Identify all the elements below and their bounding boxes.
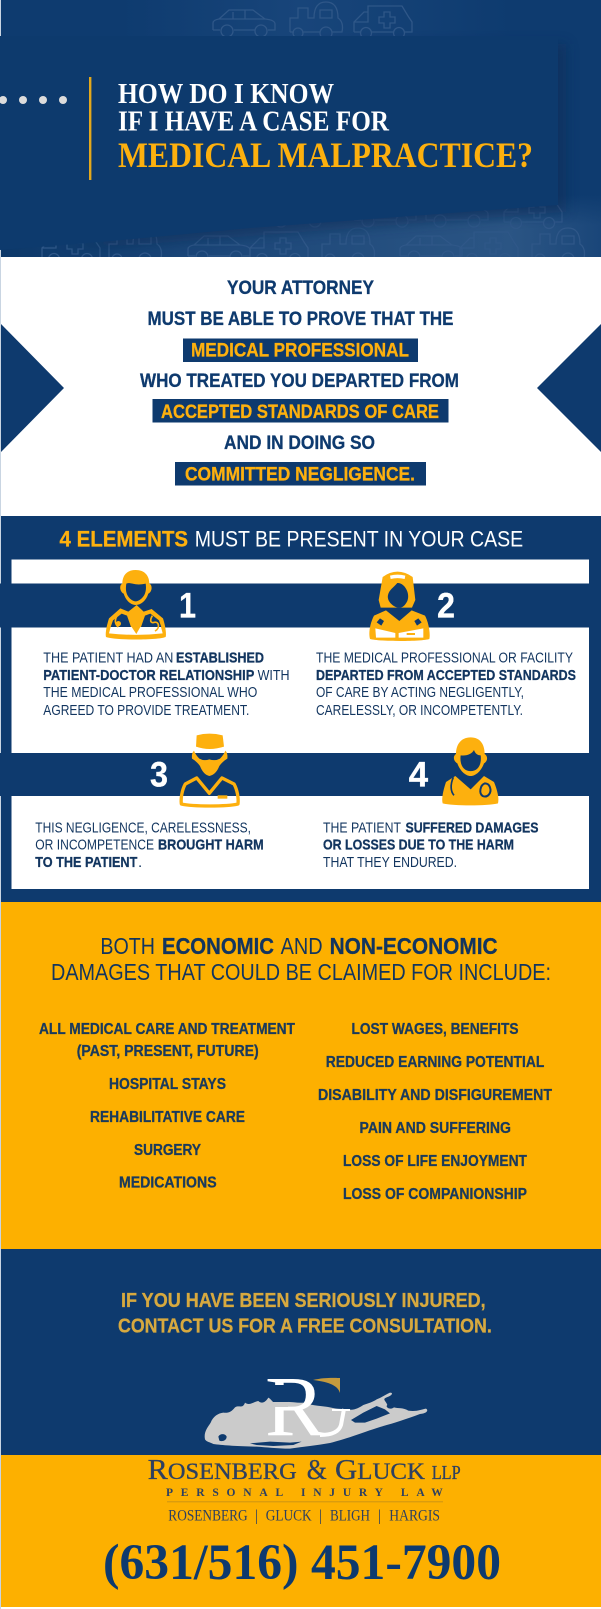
- call to action text: CONTACT US FOR A FREE CONSULTATION.: [118, 1315, 492, 1338]
- title panel: [0, 36, 558, 250]
- element 1 text: [43, 650, 290, 719]
- white cards and bands: [0, 560, 601, 889]
- intro text: [140, 277, 459, 454]
- monogram curve of G: [320, 1409, 344, 1435]
- monogram gold arc: [313, 1378, 340, 1393]
- number 4: 4: [409, 756, 429, 795]
- economic damages list: REHABILITATIVE CARE: [90, 1109, 245, 1126]
- partner names: BLIGH: [330, 1508, 370, 1525]
- firm tagline: PERSONAL INJURY LAW: [166, 1487, 443, 1499]
- partner names: GLUCK: [266, 1508, 312, 1525]
- heading: [60, 526, 523, 552]
- element 1 text: WITH: [258, 667, 290, 684]
- element 1 text: PATIENT-DOCTOR RELATIONSHIP: [43, 667, 254, 684]
- element 4 text: THAT THEY ENDURED.: [323, 854, 457, 871]
- firm name: GLUCK: [335, 1455, 425, 1486]
- firm name: ROSENBERG: [148, 1455, 297, 1486]
- element 2 text: [316, 650, 576, 719]
- element 3 text: BROUGHT HARM: [158, 836, 264, 853]
- partner names: |: [319, 1508, 322, 1525]
- intro panel: [1, 257, 601, 516]
- element 2 text: CARELESSLY, OR INCOMPETENTLY.: [316, 702, 523, 719]
- firm name: &: [307, 1455, 327, 1486]
- element 1 text: ESTABLISHED: [176, 650, 264, 667]
- title: IF I HAVE A CASE FOR: [118, 106, 390, 138]
- highlight: committed negligence: COMMITTED NEGLIGENCE.: [185, 464, 415, 486]
- partner names: |: [255, 1508, 258, 1525]
- economic damages list: MEDICATIONS: [119, 1175, 217, 1192]
- non-economic damages list: PAIN AND SUFFERING: [360, 1120, 511, 1137]
- partner names: ROSENBERG: [168, 1508, 248, 1525]
- economic damages list: ALL MEDICAL CARE AND TREATMENT: [39, 1021, 295, 1038]
- economic damages list: SURGERY: [134, 1142, 201, 1159]
- header panel: [0, 0, 601, 265]
- panel shadow: [60, 44, 566, 247]
- icon: nurse: [369, 572, 430, 641]
- element 3 text: TO THE PATIENT: [35, 854, 138, 871]
- element 3 text: [35, 819, 264, 871]
- panel: firm footer: [1, 1455, 601, 1609]
- number 3: 3: [150, 756, 168, 795]
- highlight: accepted standards of care: ACCEPTED STANDARDS OF CARE: [161, 401, 439, 423]
- intro text: AND IN DOING SO: [224, 432, 375, 454]
- title: HOW DO I KNOW: [118, 78, 334, 110]
- economic damages list: (PAST, PRESENT, FUTURE): [77, 1043, 259, 1060]
- element 2 text: OF CARE BY ACTING NEGLIGENTLY,: [316, 684, 524, 701]
- damages heading: [51, 933, 551, 985]
- damages heading: AND: [281, 933, 323, 959]
- firm name: [148, 1455, 461, 1486]
- partner names: [168, 1508, 440, 1525]
- heading: 4 ELEMENTS: [60, 526, 188, 552]
- economic damages list: HOSPITAL STAYS: [109, 1076, 226, 1093]
- element 1 text: THE MEDICAL PROFESSIONAL WHO: [43, 684, 257, 701]
- heading: MUST BE PRESENT IN YOUR CASE: [195, 526, 523, 552]
- non-economic damages list: LOSS OF LIFE ENJOYMENT: [343, 1153, 527, 1170]
- element 1 text: AGREED TO PROVIDE TREATMENT.: [43, 702, 249, 719]
- icon: doctor with stethoscope: [106, 570, 166, 639]
- intro text: YOUR ATTORNEY: [227, 277, 374, 299]
- element 3 text: OR INCOMPETENCE: [35, 836, 154, 853]
- damages heading: ECONOMIC: [162, 933, 274, 959]
- non-economic damages list: [318, 1021, 552, 1203]
- title: MEDICAL MALPRACTICE?: [118, 135, 533, 175]
- element 4 text: OR LOSSES DUE TO THE HARM: [323, 836, 514, 853]
- monogram stem cut-outs: [273, 1385, 288, 1407]
- left edge line: [0, 0, 1, 1609]
- number 2: 2: [437, 586, 455, 626]
- monogram letter R: R: [265, 1358, 326, 1454]
- panel: damages: [1, 902, 601, 1249]
- firm name: LLP: [432, 1462, 461, 1484]
- element 3 text: .: [138, 854, 142, 871]
- phone number: (631/516) 451-7900: [103, 1535, 501, 1591]
- icon: surgeon with mask: [181, 734, 238, 806]
- highlight: medical professional: MEDICAL PROFESSIONAL: [191, 340, 409, 362]
- decorative dots: [0, 96, 67, 104]
- number 1: 1: [179, 586, 196, 626]
- icon: doctor in scrubs: [442, 737, 498, 805]
- non-economic damages list: REDUCED EARNING POTENTIAL: [326, 1054, 545, 1071]
- partner names: HARGIS: [389, 1508, 440, 1525]
- element 4 text: THE PATIENT: [323, 819, 401, 836]
- element 4 text: [323, 819, 538, 871]
- logo: Long Island map with monogram: [205, 1358, 427, 1454]
- panel: call to action: [1, 1249, 601, 1455]
- gold vertical rule: [89, 77, 91, 180]
- intro text: MUST BE ABLE TO PROVE THAT THE: [148, 308, 454, 330]
- element 4 text: SUFFERED DAMAGES: [406, 819, 538, 836]
- damages heading: BOTH: [100, 933, 155, 959]
- damages heading: NON-ECONOMIC: [330, 933, 498, 959]
- non-economic damages list: DISABILITY AND DISFIGUREMENT: [318, 1087, 552, 1104]
- non-economic damages list: LOSS OF COMPANIONSHIP: [343, 1186, 527, 1203]
- non-economic damages list: LOST WAGES, BENEFITS: [352, 1021, 518, 1038]
- icon pattern: medical vehicles: [42, 2, 584, 265]
- left triangle: [1, 324, 64, 452]
- partner names: |: [378, 1508, 381, 1525]
- right triangle: [537, 324, 601, 452]
- call to action text: [118, 1289, 492, 1338]
- economic damages list: [39, 1021, 295, 1192]
- intro text: WHO TREATED YOU DEPARTED FROM: [140, 370, 459, 392]
- element 1 text: THE PATIENT HAD AN: [43, 650, 173, 667]
- element 3 text: THIS NEGLIGENCE, CARELESSNESS,: [35, 819, 251, 836]
- panel: four elements: [0, 516, 601, 902]
- title: [118, 78, 533, 175]
- call to action text: IF YOU HAVE BEEN SERIOUSLY INJURED,: [121, 1289, 486, 1312]
